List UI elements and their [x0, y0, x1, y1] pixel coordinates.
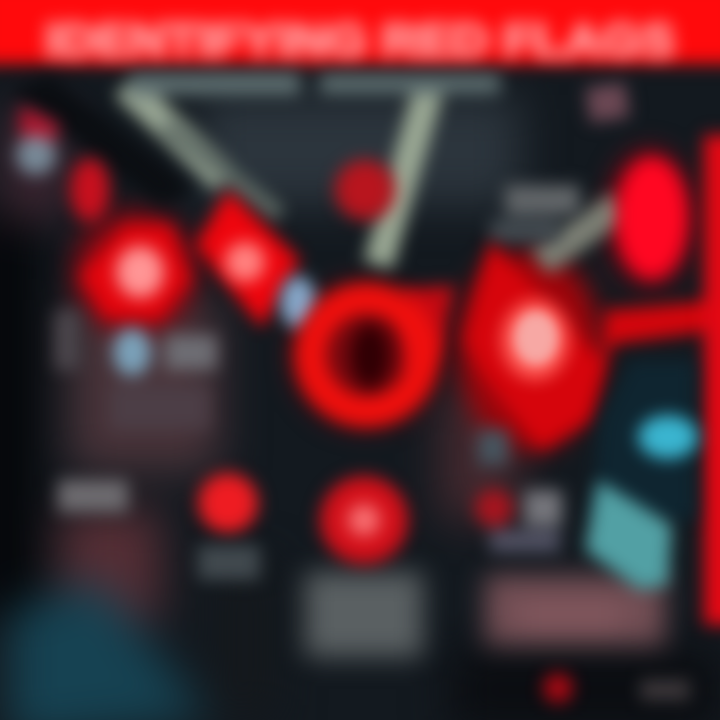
icon: red oval upper right	[617, 158, 687, 278]
grey text block: upper right	[490, 185, 580, 242]
icon: lower left red dot	[198, 473, 260, 580]
text blocks: mid left	[55, 310, 217, 430]
title band	[0, 0, 720, 66]
panel: lower centre card	[305, 572, 423, 657]
icon: large red flag marker right	[465, 240, 720, 450]
text block: lower left	[58, 480, 128, 512]
icon: cyan oval	[638, 415, 698, 459]
red halos behind markers	[73, 150, 692, 450]
right edge bar	[704, 135, 720, 625]
icon: blue dot	[280, 276, 316, 328]
arrows: light beams from title	[125, 84, 620, 265]
icon: red flag marker upper	[195, 190, 300, 328]
small markers lower right	[475, 430, 562, 552]
bottom right marks	[543, 673, 690, 703]
panel: lower right card	[485, 575, 665, 645]
panel: phone screen	[585, 360, 698, 590]
dark diagonal stripe	[10, 75, 195, 205]
icon: central ring	[311, 285, 455, 411]
icon: red flag marker left	[80, 225, 190, 320]
icon: teal tile	[585, 480, 672, 590]
icon: small top centre circle	[335, 160, 395, 220]
icon: lower centre badge	[320, 476, 408, 564]
icon: red circle top left	[16, 105, 110, 222]
title: IDENTIFYING RED FLAGS	[45, 14, 675, 66]
